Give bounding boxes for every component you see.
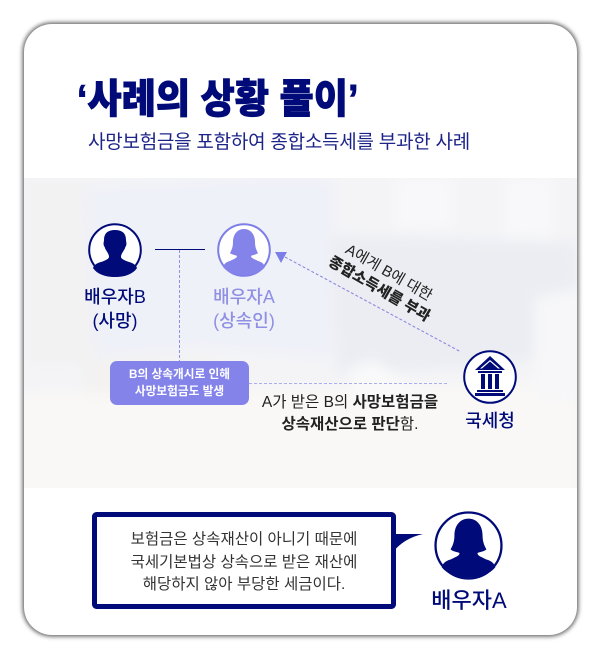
panel: blurred background photo	[24, 178, 577, 488]
icon: spouse A	[217, 223, 271, 277]
label: spouse A	[213, 287, 275, 331]
text: NTS judgement: 상속재산으로 판단함.	[282, 416, 418, 433]
label: spouse B: (사망)	[92, 311, 138, 331]
text: NTS judgement: A가 받은 B의 사망보험금을	[262, 394, 438, 411]
speech bubble text: 국세기본법상 상속으로 받은 재산에	[131, 554, 357, 570]
arrow label: tax imposed on A: A에게 B에 대한	[342, 241, 435, 304]
label: spouse A: (상속인)	[213, 311, 275, 331]
label: spouse A bottom: 배우자A	[431, 588, 507, 613]
icon: National Tax Service building	[463, 350, 517, 404]
text: NTS judgement	[262, 394, 438, 433]
speech bubble text: 해당하지 않아 부당한 세금이다.	[143, 576, 345, 593]
callout: B's inheritance start: B의 상속개시로 인해	[129, 368, 230, 381]
callout: B's inheritance start: 사망보험금도 발생	[135, 385, 224, 398]
icon: spouse A in navy	[434, 511, 503, 580]
label: spouse A: 배우자A	[213, 287, 275, 307]
callout: B's inheritance start	[110, 361, 249, 405]
speech bubble text	[131, 531, 357, 593]
label: spouse B: 배우자B	[84, 287, 146, 307]
label: National Tax Service: 국세청	[465, 411, 515, 431]
icon: spouse B	[88, 223, 142, 277]
arrow label: tax imposed on A: 종합소득세를 부과	[325, 253, 433, 325]
subtitle: 사망보험금을 포함하여 종합소득세를 부과한 사례	[88, 132, 470, 153]
label: spouse B	[84, 287, 146, 331]
speech bubble text: 보험금은 상속재산이 아니기 때문에	[131, 531, 357, 548]
title: ‘사례의 상황 풀이’	[77, 77, 359, 121]
